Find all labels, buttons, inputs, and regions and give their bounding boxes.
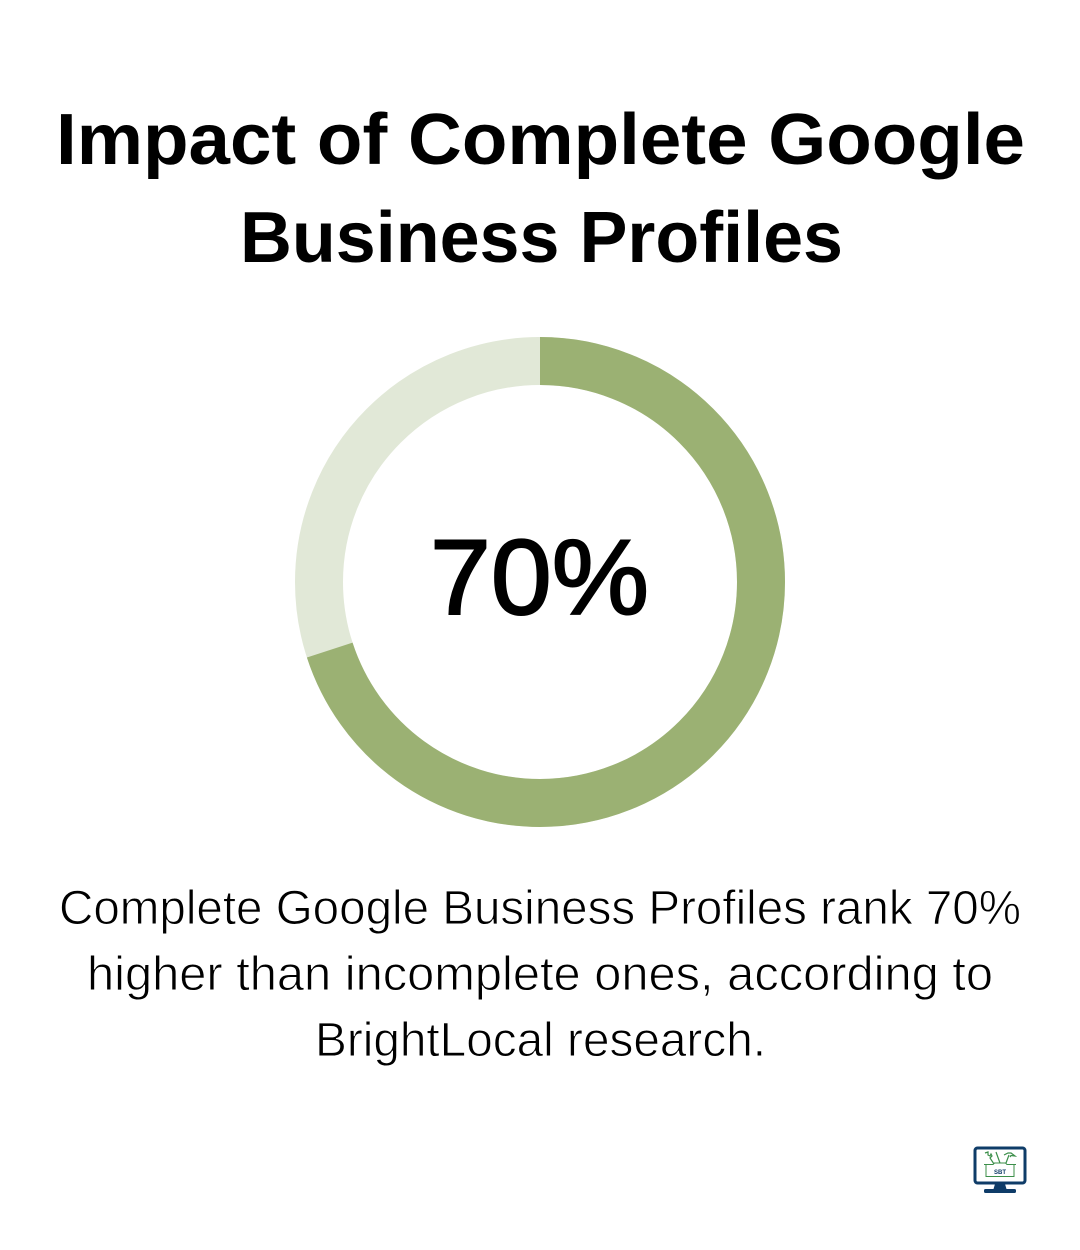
title: Business Profiles [240, 198, 843, 278]
title [56, 100, 1025, 278]
title: Impact of Complete Google [56, 100, 1025, 180]
donut chart: 70% [319, 361, 761, 803]
icon: SBT monitor logo with toolbox [975, 1148, 1025, 1193]
icon: SBT monitor logo with toolbox: SBT [994, 1170, 1006, 1176]
description text: higher than incomplete ones, according to [87, 948, 993, 1001]
description text: BrightLocal research. [315, 1014, 766, 1067]
description text: Complete Google Business Profiles rank 70% [59, 882, 1021, 935]
donut value: 70% [430, 517, 649, 637]
description text [59, 882, 1021, 1067]
